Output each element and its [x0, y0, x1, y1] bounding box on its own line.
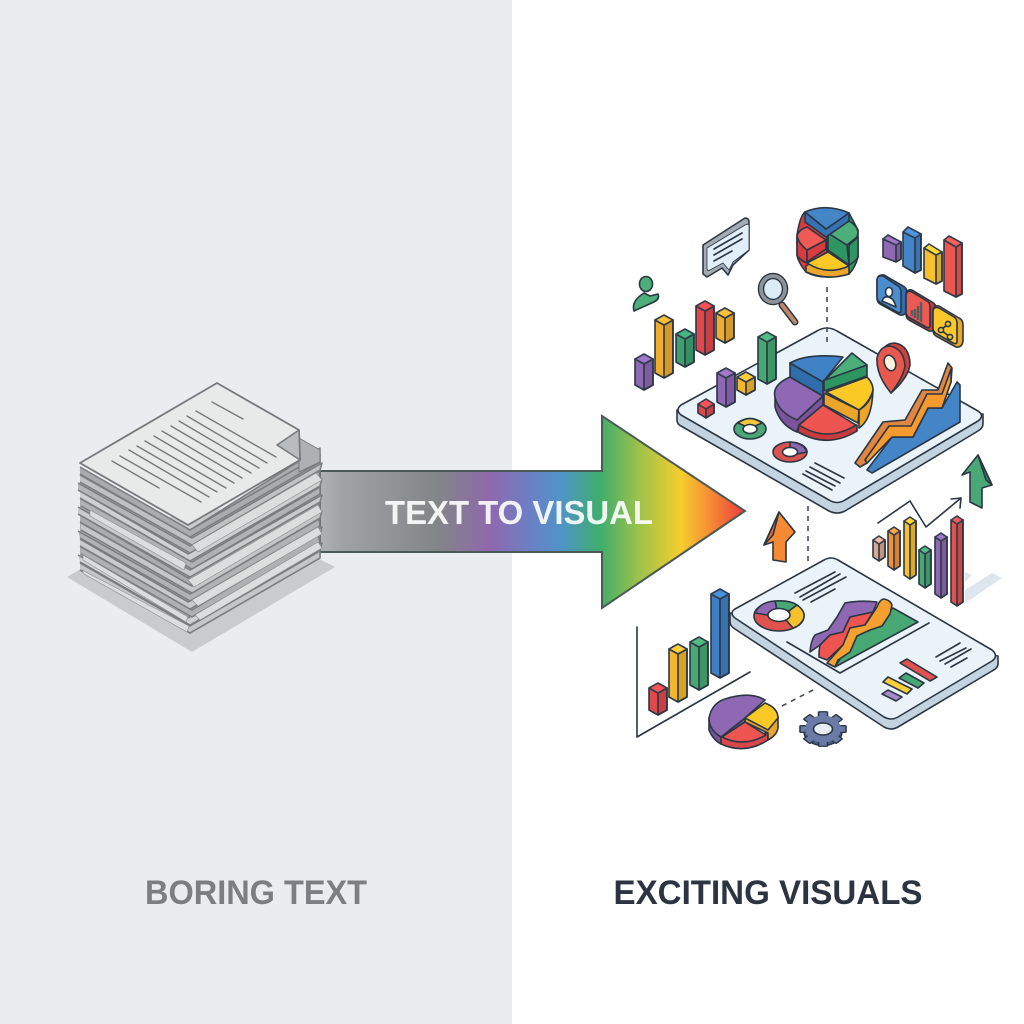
purple side — [709, 718, 745, 744]
area chart: blue ridge — [867, 382, 960, 473]
text lines on platform — [803, 463, 844, 490]
green slice — [828, 221, 858, 245]
panel: exciting visuals background — [512, 0, 1024, 1024]
panel: boring text background — [0, 0, 512, 1024]
yellow slice — [826, 377, 873, 410]
dashed connectors — [782, 287, 827, 706]
blue slice — [790, 356, 843, 382]
arrow: text to visual — [320, 416, 745, 608]
platform side — [677, 410, 983, 513]
icon: orange up arrow — [764, 512, 795, 562]
pie rim — [806, 250, 849, 277]
panel: lower isometric dashboard — [730, 558, 998, 729]
bar chart: lower left — [637, 589, 750, 737]
area chart: orange ridge top — [855, 363, 952, 467]
mini donut red — [773, 442, 807, 462]
yellow side — [745, 717, 778, 740]
red slice — [722, 722, 766, 742]
chart axes — [637, 627, 750, 737]
red slice side — [807, 240, 826, 262]
icon: layered pie chart — [797, 208, 858, 277]
pie base right half — [827, 213, 858, 277]
horizontal bars — [882, 659, 937, 701]
stack shadow — [67, 500, 335, 652]
green slice right side — [849, 237, 858, 265]
sheet behind page curl — [299, 438, 320, 472]
panel: top isometric dashboard — [677, 328, 983, 513]
trend line with arrow — [878, 498, 961, 527]
pie base left half — [797, 212, 827, 277]
heading: exciting visuals: EXCITING VISUALS — [614, 874, 922, 912]
text lines top — [795, 572, 846, 602]
icon: green up arrow — [962, 455, 992, 508]
heading: boring text: BORING TEXT — [145, 874, 367, 912]
icon: speech bubble — [703, 218, 749, 277]
purple slice side — [775, 395, 823, 432]
icons: app tiles — [877, 275, 963, 347]
stacked sheets — [78, 448, 322, 633]
blue person tile — [877, 275, 907, 315]
blue slice side — [805, 212, 849, 237]
yellow slice — [807, 252, 849, 270]
purple slice — [775, 377, 823, 420]
bar chart: upper right — [883, 227, 962, 297]
yellow slice — [745, 703, 778, 730]
donut chart — [754, 601, 804, 631]
red chart tile — [906, 290, 936, 331]
icon: magnifying glass — [761, 276, 795, 322]
icon: person — [633, 276, 658, 311]
red slice — [797, 227, 826, 250]
text lines on page — [112, 402, 276, 502]
purple slice — [709, 695, 765, 737]
icon: small pie chart — [709, 695, 778, 749]
yellow cube — [737, 372, 755, 395]
green slice side — [828, 233, 849, 265]
top page — [80, 383, 300, 525]
purple bar — [717, 368, 735, 407]
green bar — [758, 332, 776, 384]
bar chart: upper left — [635, 301, 734, 390]
area chart: orange ridge face — [865, 369, 951, 463]
red rim — [721, 733, 768, 749]
pie chart — [775, 353, 873, 440]
red slice — [799, 405, 856, 434]
page curl — [277, 430, 300, 460]
platform top — [678, 328, 982, 502]
green wedge — [825, 353, 867, 380]
shadow behind bar chart — [965, 572, 1002, 602]
arrow label: TEXT TO VISUAL — [385, 494, 653, 531]
icon: stack of paper documents — [67, 383, 335, 652]
platform side — [730, 613, 998, 729]
blue slice — [805, 208, 849, 229]
red slice rim — [798, 425, 857, 440]
icon: gear — [800, 712, 846, 746]
area chart axes — [787, 623, 929, 673]
platform top — [732, 558, 996, 719]
light paper strips — [192, 473, 322, 552]
green wedge side — [824, 365, 867, 391]
bar chart: lower right — [873, 516, 963, 606]
text lines right — [936, 643, 971, 667]
icon: map pin — [877, 343, 910, 393]
area chart — [810, 599, 918, 667]
yellow share tile — [933, 306, 963, 347]
blue slice side — [790, 363, 823, 396]
red slice left side — [797, 237, 807, 263]
mini donut green — [734, 418, 766, 439]
red cube — [698, 399, 714, 418]
yellow slice side — [824, 393, 859, 423]
yellow slice right side — [859, 390, 873, 428]
